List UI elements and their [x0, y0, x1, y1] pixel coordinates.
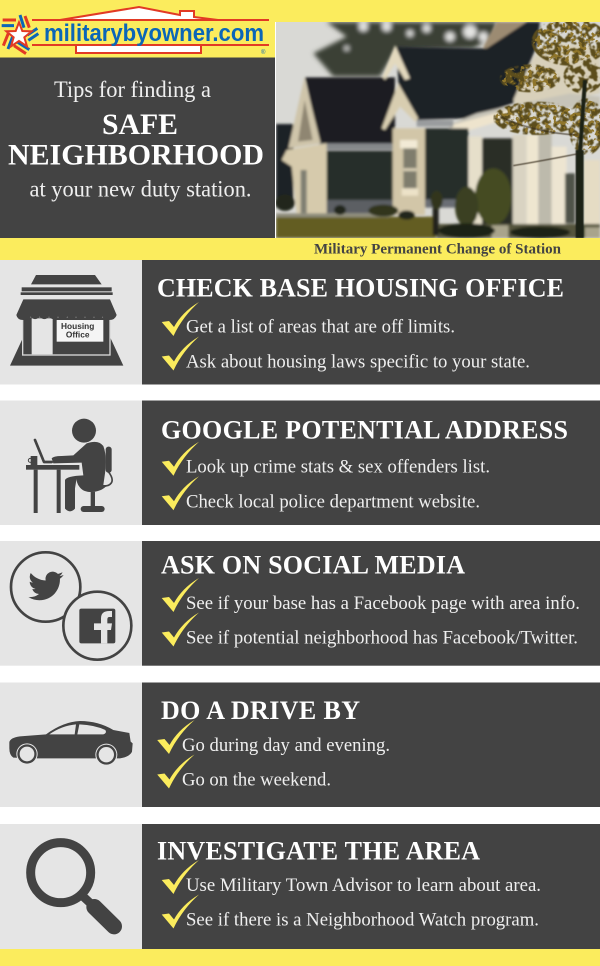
check mark [157, 720, 194, 754]
top yellow band [0, 0, 600, 22]
heading: ASK ON SOCIAL MEDIA [161, 550, 465, 579]
title text: NEIGHBORHOOD [8, 139, 264, 172]
photo: houses with tree [275, 18, 600, 238]
bullet: Go on the weekend. [182, 770, 331, 790]
icon: twitter circle [11, 552, 80, 622]
bullet: Check local police department website. [186, 491, 480, 512]
heading: CHECK BASE HOUSING OFFICE [157, 274, 564, 303]
check mark [162, 578, 199, 612]
check mark [162, 476, 199, 510]
check mark [162, 302, 199, 336]
heading: GOOGLE POTENTIAL ADDRESS [161, 416, 568, 445]
bullet: Ask about housing laws specific to your state. [186, 351, 530, 372]
bullet: Go during day and evening. [182, 735, 390, 756]
check mark [162, 612, 199, 646]
title panel [0, 58, 275, 238]
logo: militarybyowner.com [0, 0, 275, 58]
foliage [493, 18, 600, 155]
panel: google potential address [0, 400, 600, 525]
yellow caption band: Military Permanent Change of Station [314, 242, 562, 258]
panel: do a drive by [0, 682, 600, 807]
title text [8, 77, 264, 202]
title text: at your new duty station. [30, 177, 252, 202]
icon: housing office storefront [10, 275, 123, 366]
bullet: See if your base has a Facebook page with area info. [186, 593, 580, 614]
icon: magnifying glass [31, 843, 114, 926]
bullet: Look up crime stats & sex offenders list. [186, 457, 490, 478]
bottom yellow band [0, 949, 600, 966]
bullet: See if potential neighborhood has Facebook/Twitter. [186, 628, 578, 648]
panel: ask on social media [0, 541, 600, 666]
icon: facebook circle [63, 592, 131, 660]
icon: housing office storefront: Office [66, 330, 90, 340]
check mark [162, 894, 199, 928]
check mark [157, 754, 194, 788]
title text: Tips for finding a [54, 77, 211, 102]
icon: person at laptop [26, 419, 112, 513]
check mark [162, 860, 199, 894]
check mark [162, 336, 199, 370]
bullet: See if there is a Neighborhood Watch program. [186, 910, 539, 930]
logo: militarybyowner.com: ® [261, 49, 266, 56]
panel: check base housing office [0, 260, 600, 384]
logo: militarybyowner.com: militarybyowner.com [44, 20, 264, 47]
icon: housing office storefront: Housing [61, 321, 94, 331]
check mark [162, 442, 199, 476]
heading: DO A DRIVE BY [161, 696, 360, 725]
heading: INVESTIGATE THE AREA [157, 837, 480, 866]
bullet: Get a list of areas that are off limits. [186, 317, 455, 338]
panel: investigate the area [0, 824, 600, 949]
title text: SAFE [102, 108, 178, 141]
yellow caption band [0, 238, 600, 260]
bullet: Use Military Town Advisor to learn about area. [186, 875, 541, 896]
icon: car [9, 721, 133, 766]
